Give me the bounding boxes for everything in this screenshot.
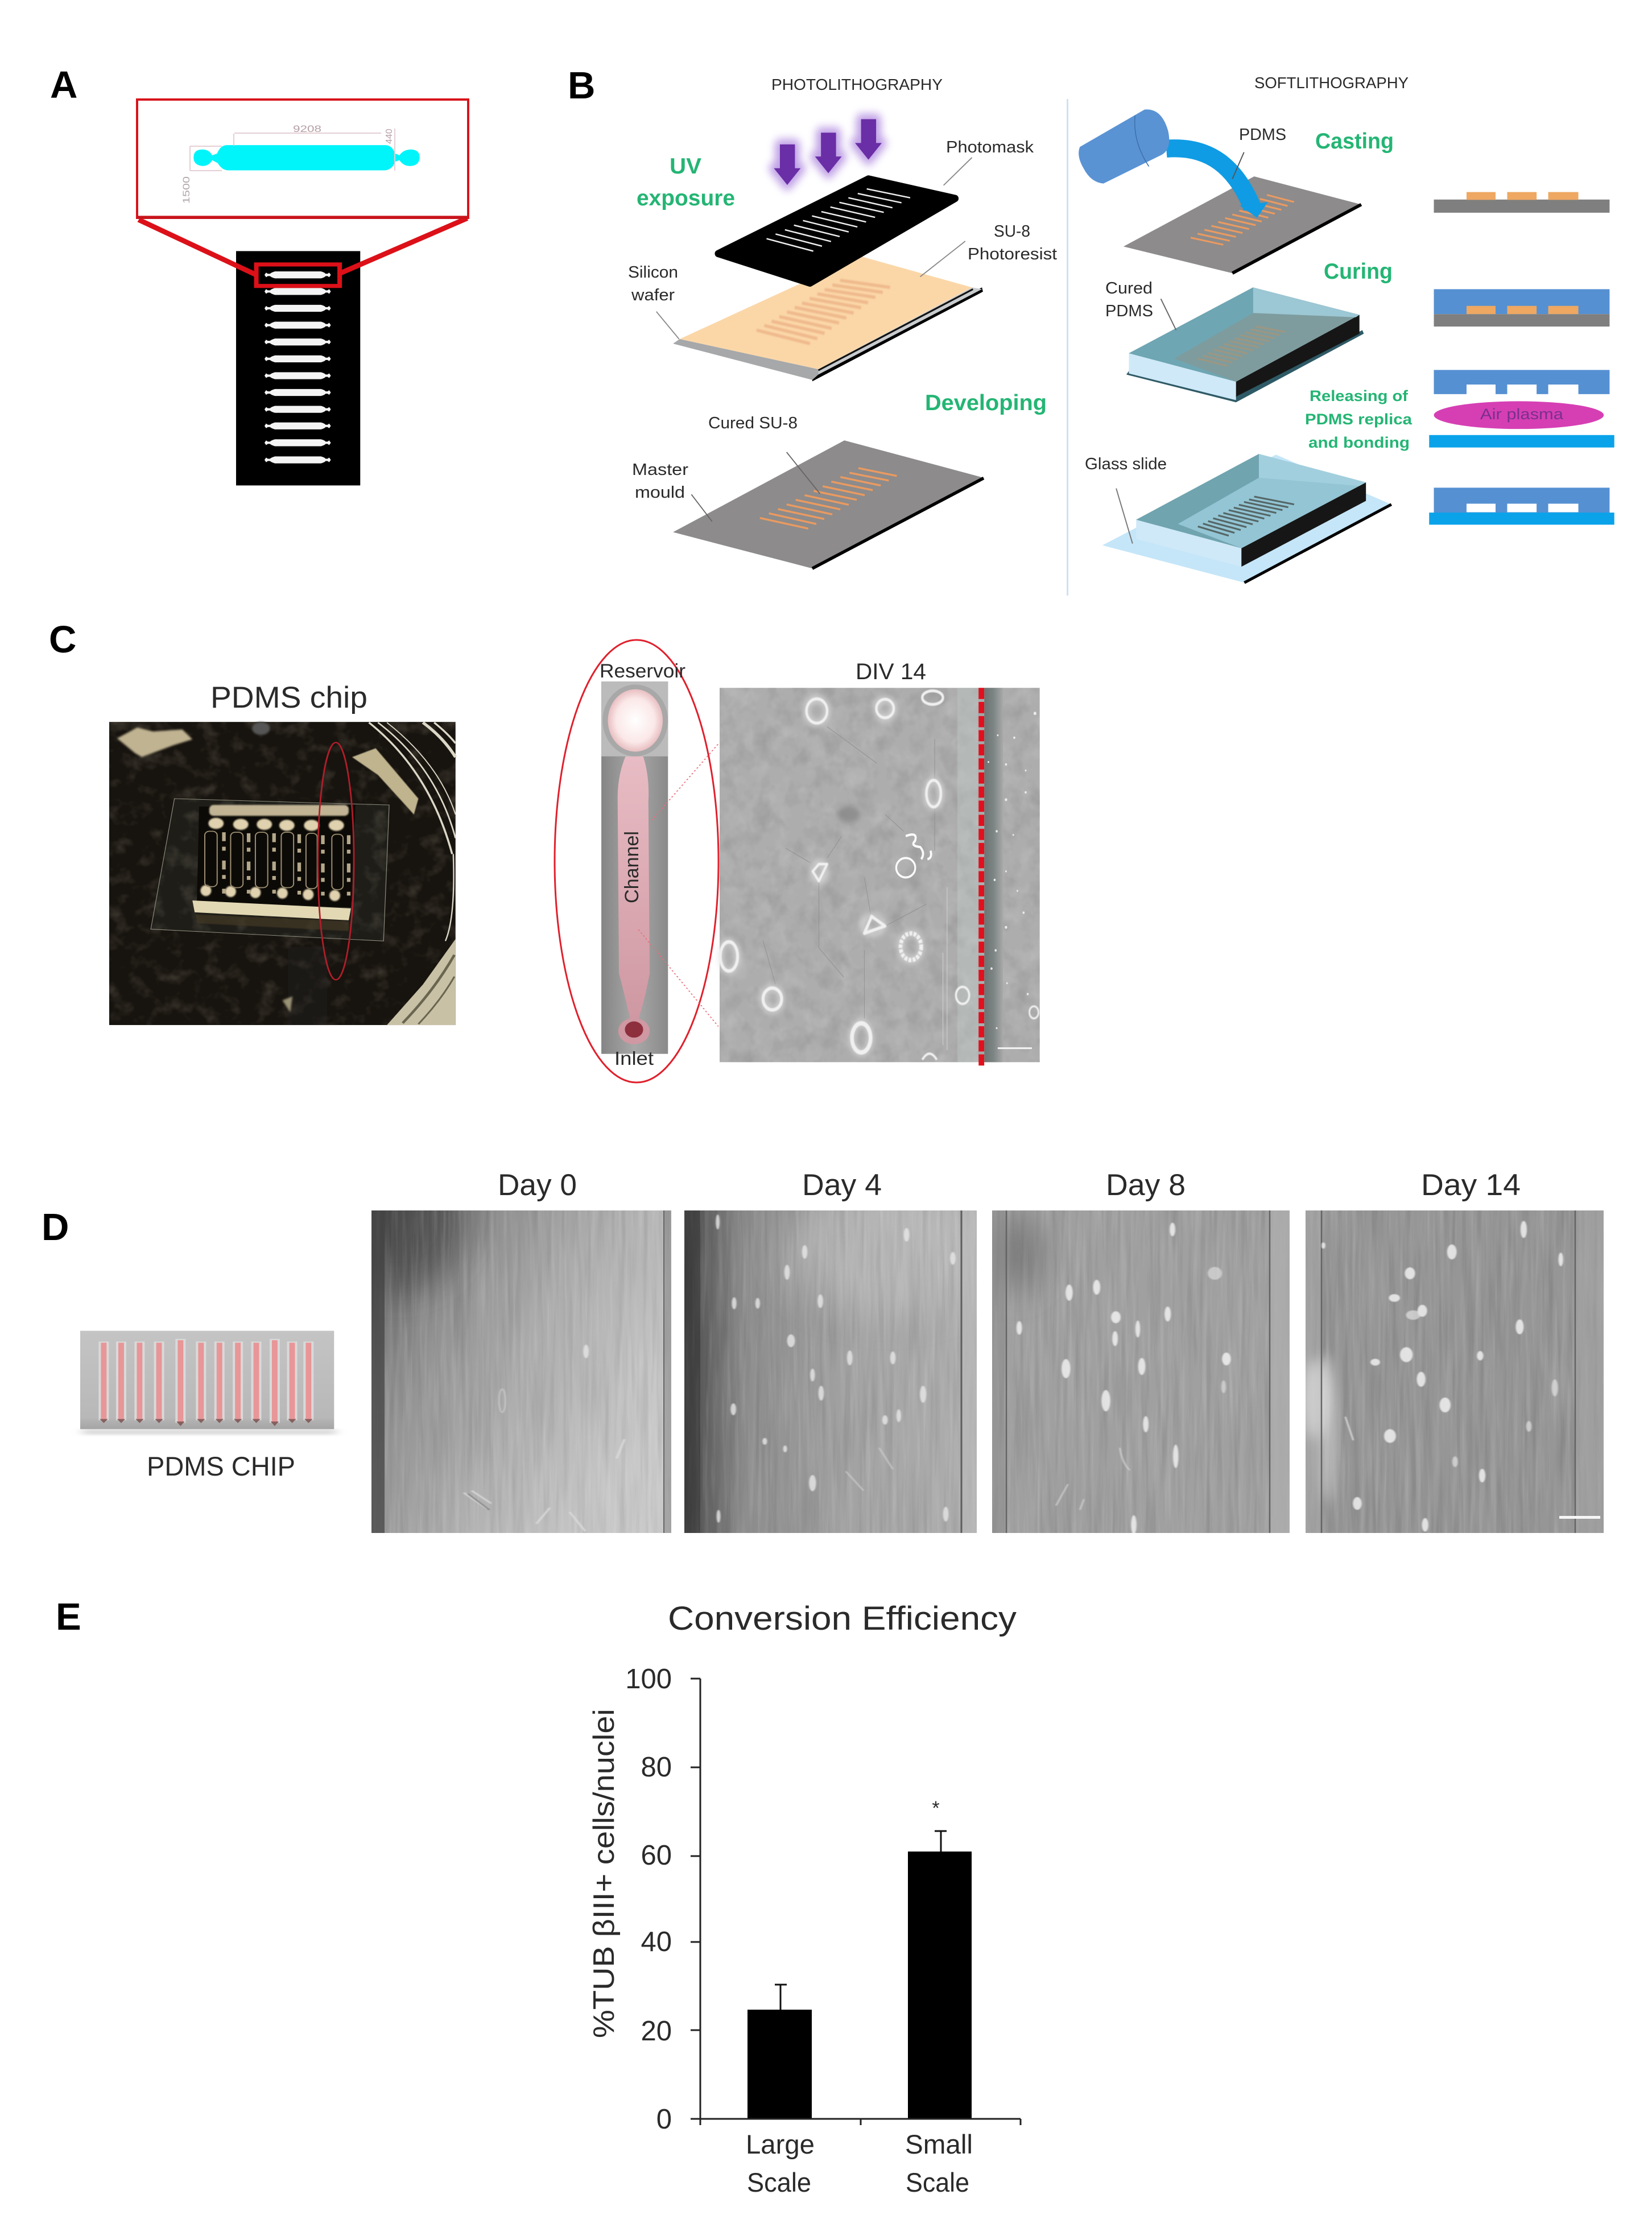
x label: small scale: Small — [905, 2129, 973, 2159]
leader lines — [656, 158, 972, 339]
panel C: chip and culture — [49, 618, 1040, 1082]
y axis tick labels: 40 — [641, 1927, 672, 1957]
label: master mould — [632, 461, 688, 502]
label: PDMS: PDMS — [1239, 126, 1286, 144]
title: Day 0: Day 0 — [498, 1168, 577, 1202]
single channel image — [601, 681, 718, 1054]
heading: C: C — [49, 618, 76, 661]
scale bar — [1559, 1516, 1600, 1519]
title: PDMS chip: PDMS chip — [210, 681, 367, 714]
step label: UV exposure: UV — [670, 154, 701, 179]
label: SU-8 photoresist — [968, 222, 1057, 263]
red dashed channel boundary — [974, 688, 989, 1067]
y axis tick labels: 100 — [625, 1664, 672, 1695]
step label: releasing and bonding: Releasing of — [1310, 387, 1409, 404]
cell halos — [720, 699, 941, 1052]
label: PDMS CHIP: PDMS CHIP — [147, 1451, 295, 1481]
silicon wafer with SU-8 photoresist — [673, 256, 983, 381]
title: DIV 14: DIV 14 — [856, 659, 926, 684]
dimension lines — [190, 129, 395, 171]
black photomask with 12 channels — [137, 217, 468, 485]
label: reservoir: Reservoir — [600, 660, 685, 682]
label: cured PDMS: Cured — [1105, 279, 1153, 297]
title: Day 14: Day 14 — [1421, 1168, 1521, 1202]
dimension value: length: 9208 — [293, 123, 321, 134]
red ellipse around channel detail — [555, 640, 718, 1082]
step label: curing: Curing — [1324, 259, 1393, 284]
chart title: Conversion Efficiency — [668, 1600, 1017, 1637]
y axis tick labels: 0 — [656, 2104, 672, 2135]
label: silicon wafer: Silicon — [628, 263, 678, 282]
red selection box and zoom lines — [137, 217, 468, 286]
cross-section 4: bonded device — [1429, 487, 1614, 524]
panel B: softlithography — [1079, 74, 1614, 582]
heading: D: D — [42, 1206, 69, 1249]
label: channel: Channel — [621, 831, 643, 903]
icon: PDMS pouring container — [1079, 109, 1268, 218]
x label: large scale: Large — [746, 2129, 815, 2159]
y axis tick labels: 80 — [641, 1752, 672, 1783]
axes and ticks — [691, 1679, 1021, 2125]
x label: small scale: Scale — [906, 2167, 969, 2197]
title: Day 4: Day 4 — [802, 1168, 882, 1202]
heading: A: A — [50, 64, 77, 106]
bonded PDMS on glass slide — [1102, 454, 1391, 582]
master mould plate — [673, 440, 984, 568]
significance star: * — [932, 1797, 940, 1819]
micrograph: Day 0 — [371, 1210, 671, 1533]
zoom inset with channel drawing — [137, 100, 468, 218]
UV arrows — [774, 119, 882, 185]
casting mould plate — [1124, 176, 1361, 273]
label: silicon wafer: wafer — [631, 286, 675, 304]
cross-section 2: PDMS cast on mould — [1434, 289, 1609, 327]
cyan channel shape — [193, 145, 420, 171]
photomask plate — [718, 179, 955, 283]
step label: developing: Developing — [925, 391, 1047, 415]
red selection ellipse on photo — [318, 742, 354, 980]
label: cured PDMS: PDMS — [1105, 302, 1153, 320]
bar: small scale — [908, 1831, 972, 2119]
title: softlithography: SOFTLITHOGRAPHY — [1254, 74, 1409, 92]
y axis tick labels: 20 — [641, 2016, 672, 2047]
label: inlet: Inlet — [614, 1048, 654, 1069]
panel B: photolithography — [568, 64, 1057, 568]
cross-section 1: mould — [1434, 192, 1609, 213]
x label: large scale: Scale — [747, 2167, 811, 2197]
divider between photolithography and softlithography — [1067, 99, 1068, 596]
cross-section 3: replica and air plasma — [1429, 370, 1614, 448]
step label: UV exposure — [637, 154, 735, 210]
label: photomask: Photomask — [946, 138, 1034, 156]
dimension value: total: 1500 — [181, 176, 192, 204]
y axis tick labels: 60 — [641, 1840, 672, 1871]
label: SU-8 photoresist: Photoresist — [968, 245, 1057, 263]
label: air plasma: Air plasma — [1480, 406, 1564, 423]
label: cured SU-8: Cured SU-8 — [708, 414, 798, 432]
label: cured PDMS — [1105, 279, 1153, 320]
micrograph: Day 8 — [992, 1210, 1290, 1535]
title: photolithography: PHOTOLITHOGRAPHY — [771, 76, 943, 93]
bright ring cell — [896, 858, 915, 878]
x label: small scale — [905, 2129, 973, 2197]
step label: casting: Casting — [1315, 129, 1394, 154]
scale bar — [998, 1047, 1032, 1049]
heading: B: B — [568, 64, 595, 107]
heading: E: E — [56, 1596, 81, 1638]
x label: large scale — [746, 2129, 815, 2197]
bar: large scale — [747, 1985, 812, 2119]
label: master mould: mould — [635, 484, 685, 502]
PDMS chip graphic — [80, 1331, 336, 1435]
dimension value: width: 440 — [385, 129, 394, 144]
label: silicon wafer — [628, 263, 678, 304]
micrograph DIV 14 — [720, 688, 1040, 1067]
label: master mould: Master — [632, 461, 688, 479]
micrograph: Day 4 — [684, 1210, 977, 1533]
step label: releasing and bonding — [1305, 387, 1413, 451]
photo of PDMS chip in dish — [109, 722, 456, 1025]
cured PDMS block on mould — [1126, 287, 1364, 402]
y axis label: %TUB βIII+ cells/nuclei — [588, 1709, 621, 2038]
y axis tick labels — [625, 1664, 672, 2135]
squiggle cell — [906, 834, 931, 859]
micrograph: Day 14 — [1303, 1210, 1604, 1533]
panel D: time course — [42, 1155, 1604, 1535]
label: glass slide: Glass slide — [1085, 455, 1167, 473]
label: SU-8 photoresist: SU-8 — [994, 222, 1030, 241]
panel E: conversion efficiency chart — [56, 1596, 1021, 2197]
step label: UV exposure: exposure — [637, 186, 735, 210]
panel A: photomask design — [50, 64, 468, 485]
step label: releasing and bonding: and bonding — [1308, 434, 1410, 451]
title: Day 8: Day 8 — [1106, 1168, 1186, 1202]
step label: releasing and bonding: PDMS replica — [1305, 411, 1413, 428]
